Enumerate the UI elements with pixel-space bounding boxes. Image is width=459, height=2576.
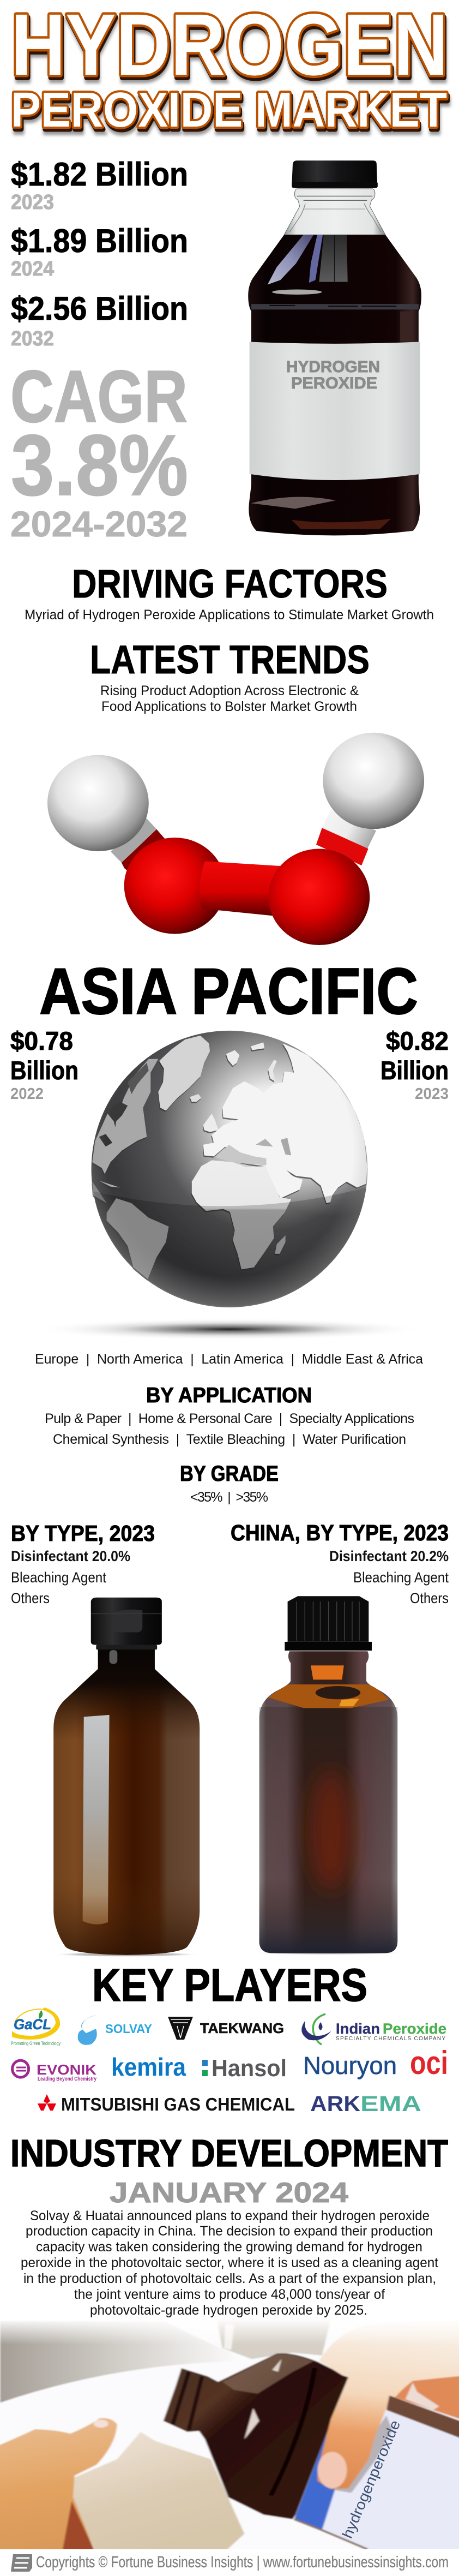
latest trends text: Food Applications to Bolster Market Growth [101,699,357,714]
development paragraph: peroxide in the photovoltaic sector, where it is used as a cleaning agent [21,2255,438,2270]
shoulder shade [53,1647,200,1745]
bottle cap [292,160,378,188]
date: JANUARY 2024 [110,2177,348,2209]
base shade [53,1877,200,1955]
stat: 2022 value: 2022 [10,1085,44,1103]
hand shadow [62,2501,95,2549]
heading: by grade: BY GRADE [180,1462,279,1486]
logo: Arkema: EMA [360,2092,421,2116]
driving factors text: Myriad of Hydrogen Peroxide Applications to Stimulate Market Growth [25,607,434,623]
stat 2024: $1.89 Billion [11,223,188,259]
illustration: H2O2 molecule [47,733,424,945]
key players logos [11,2007,448,2116]
bottle band [271,2368,315,2496]
tissue [73,2432,244,2554]
logo: Solvay: SOLVAY [105,2022,152,2036]
photo: pouring hydrogen peroxide [0,2321,459,2549]
illustration: amber bottle [53,1598,200,1957]
icon: Fortune Business Insights logo [11,2554,32,2572]
stat 2032: $2.56 Billion [11,290,188,327]
latest trends text: Rising Product Adoption Across Electronic & [100,683,359,698]
logo: Indian Peroxide [301,2014,446,2045]
hydrogen atoms [47,733,424,851]
logo: Evonik [13,2060,96,2082]
stat 2023: $1.82 Billion [11,156,188,193]
heading: by application: BY APPLICATION [146,1384,312,1407]
CAGR value: 3.8% [11,417,188,513]
panel: China by type 2023 [231,1520,449,1955]
legend: Others [11,1590,50,1606]
globe rim light [92,1031,367,1307]
label lower edge [294,2519,367,2549]
latest trends text [100,683,359,714]
fingernail [94,2419,108,2428]
right oxygen atom [268,849,370,945]
liquid highlights [251,235,419,529]
heading: Asia Pacific: ASIA PACIFIC [39,955,418,1028]
shoulder amber band [268,1684,389,1708]
logo: Arkema [310,2092,421,2116]
legend: Disinfectant 20.2% [329,1548,449,1564]
logo: GACL: GaCL [14,2016,51,2033]
bottle label text: HYDROGEN [286,358,380,376]
heading: key players: KEY PLAYERS [92,1959,367,2011]
development paragraph: photovoltaic-grade hydrogen peroxide by 2025. [90,2303,367,2318]
bottle label text [286,358,380,392]
body shading [259,1707,397,1953]
bottle shoulder light [222,2354,313,2394]
right O-H bond [316,810,376,865]
shoulder glint [339,1699,359,1706]
development paragraph: production capacity in China. The decision to expand their production [26,2224,433,2239]
development paragraph: capacity was taken considering the growing demand for hydrogen [36,2239,422,2255]
stat 2032: 2032 [11,327,54,350]
bottle on photo [164,2353,348,2519]
right hand [318,2319,459,2489]
shoulder dark spot [316,1686,360,1699]
title shadow [13,2,450,144]
left O-H bond [111,818,167,874]
footer [11,2554,449,2572]
stat: 2022 value: Billion [10,1056,78,1085]
heading: driving factors: DRIVING FACTORS [72,562,388,606]
legend: Others [410,1590,449,1606]
bottle shadow [53,1952,200,1957]
logo: Evonik: Leading Beyond Chemistry [38,2076,96,2082]
legend: Disinfectant 20.0% [11,1548,130,1564]
legend: Bleaching Agent [11,1569,106,1586]
bottle label text: PEROXIDE [291,374,377,392]
illustration: amber glass bottle [253,1596,404,1955]
logo: Taekwang: TAEKWANG [200,2020,284,2036]
logo: GACL [11,2007,61,2046]
logo: GACL: Promoting Green Technology [11,2041,61,2046]
bottle label text on photo: hydrogenperoxide [339,2418,403,2541]
stat 2023: 2023 [11,191,54,214]
stat: 2023 value: 2023 [415,1085,449,1103]
heading: latest trends: LATEST TRENDS [90,638,370,682]
label shadow [335,2416,392,2493]
neck collar [96,1645,157,1649]
heading: by type: BY TYPE, 2023 [11,1521,155,1546]
development paragraph [21,2208,438,2318]
left oxygen atom [124,838,225,934]
CAGR label: CAGR [10,355,188,438]
bottle body [53,1647,200,1955]
globe lower shading [94,1187,366,1306]
stat 2023 [11,156,188,214]
stat 2032 [11,290,188,350]
grade list: <35% | >35% [190,1490,268,1505]
stat 2024: 2024 [11,258,54,280]
bottle label [250,342,420,480]
development paragraph: the joint venture aims to produce 48,000 tons/year of [74,2287,385,2302]
panel: by type 2023 [11,1521,200,1957]
stat: 2023 value: Billion [381,1056,449,1085]
bottle shadow [253,1951,404,1955]
illustration: globe [92,1031,367,1307]
globe sphere [92,1031,367,1307]
regions list: Europe | North America | Latin America | Middle East & Africa [35,1352,423,1367]
logo: Kemira: kemira [111,2053,186,2081]
logo: Mitsubishi Gas Chemical: MITSUBISHI GAS CHEMICAL [61,2094,295,2114]
bottle body [259,1651,397,1953]
neck amber band [311,1665,344,1680]
logo: Taekwang [168,2017,284,2040]
application list: Pulp & Paper | Home & Personal Care | Specialty Applications [45,1411,414,1426]
top fade [0,2318,459,2342]
ring and label edge [386,2383,459,2440]
legend [11,1548,130,1606]
logo: Nouryon: Nouryon [303,2052,397,2079]
development paragraph: in the production of photovoltaic cells. As a part of the expansion plan, [23,2271,436,2286]
market size stats [11,156,188,350]
bottle label [322,2410,459,2556]
legend [329,1548,449,1606]
logo: Arkema: ARK [310,2092,360,2116]
development paragraph: Solvay & Huatai announced plans to expand their hydrogen peroxide [30,2208,430,2224]
stat: 2023 value: $0.82 [386,1026,449,1055]
application list [45,1411,414,1447]
other fingers [389,2375,459,2421]
stat 2024 [11,223,188,280]
logo: Indian Peroxide: Indian [336,2021,380,2037]
logo: Indian Peroxide: SPECIALTY CHEMICALS COMPANY [336,2036,445,2042]
left hand [0,2418,117,2556]
blue label stripe [293,2432,336,2530]
stat: 2022 value: $0.78 [10,1026,73,1055]
bottle glints [244,2359,282,2439]
illustration: hydrogen peroxide bottle [248,160,421,535]
title [11,0,450,144]
bottle cap [285,1596,372,1651]
bottle highlight [83,1715,110,1924]
globe ground shadow [35,1318,424,1340]
logo: Indian Peroxide: Peroxide [383,2021,446,2037]
inland seas and lakes [99,1063,291,1165]
glass details [289,196,381,232]
bottle liquid [248,235,421,535]
legend: Bleaching Agent [353,1569,449,1586]
continents [92,1036,367,1279]
logo: OCI: oci [410,2045,448,2081]
photo contents [0,2321,459,2549]
red glow [310,1768,352,1891]
bottle cap [91,1598,162,1645]
photo background [0,2321,459,2549]
bottle neck grooves [173,2372,202,2430]
neck highlight [110,1650,117,1664]
logo: Hansol: Hansol [212,2055,287,2082]
thumb nail [318,2452,347,2488]
CAGR block [10,355,188,544]
logo: Evonik: EVONIK [37,2061,96,2078]
stat: 2023 value [381,1026,449,1103]
O-O bond [200,861,281,916]
CAGR period: 2024-2032 [10,504,188,544]
logo: Solvay [78,2015,152,2045]
stat: 2022 value [10,1026,78,1103]
application list: Chemical Synthesis | Textile Bleaching | Water Purification [53,1432,406,1447]
bottle glass [284,189,385,235]
